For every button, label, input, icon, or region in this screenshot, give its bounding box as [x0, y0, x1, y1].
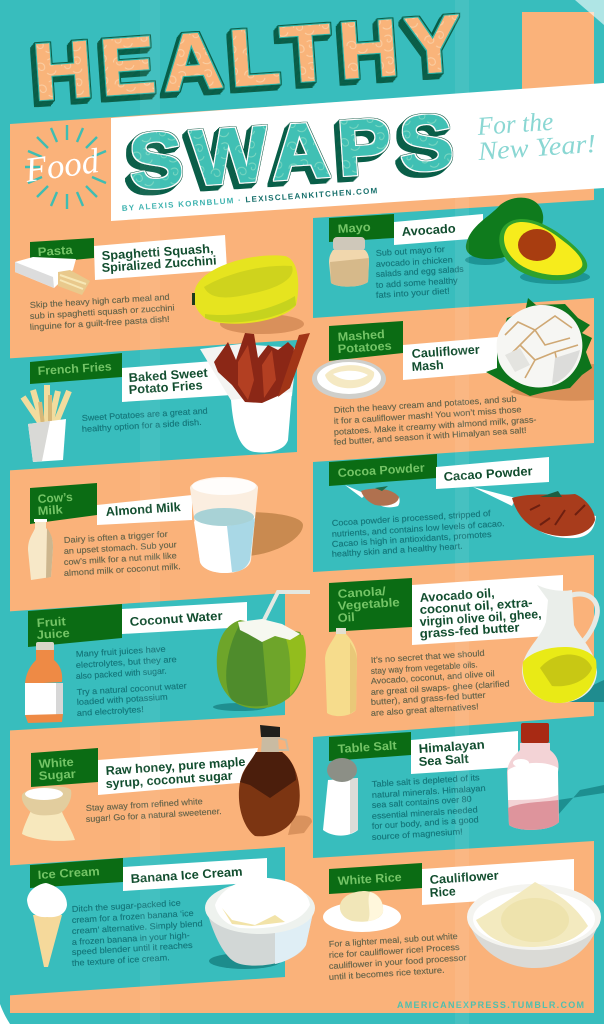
- title box: cacao powder: Cacao Powder: [443, 464, 533, 484]
- icon: maple syrup bottle: [239, 725, 312, 836]
- body text: cow's milk: Dairy is often a trigger for: [64, 529, 168, 545]
- body text: french fries: Sweet Potatoes are a great and: [82, 406, 208, 423]
- title box: himalayan sea salt: Himalayan: [418, 738, 485, 756]
- body text: ice cream: speed blender until it reaches: [72, 940, 193, 957]
- title box: cauliflower mash: Mash: [411, 358, 444, 374]
- body text: white rice: [328, 931, 467, 982]
- icon: olive oil jug: [522, 585, 604, 703]
- title box: raw honey: [98, 748, 258, 795]
- label: white sugar: Sugar: [38, 767, 76, 783]
- subtitle: For the New Year: [474, 104, 597, 166]
- tag: pasta: [30, 238, 94, 264]
- body text: pasta: [30, 292, 175, 332]
- body text: canola oil: It’s no secret that we should: [370, 648, 485, 665]
- label: mashed potatoes: Mashed: [337, 327, 385, 344]
- icon: mayo jar: [329, 237, 369, 287]
- body text: pasta: sub in spaghetti squash or zucchini: [30, 302, 175, 321]
- body text: mayo: to add some healthy: [376, 275, 459, 290]
- panel: top right orange block: [522, 12, 594, 102]
- panel: mashed potatoes orange: [313, 298, 594, 462]
- body text: white rice: cauliflower in your food processor: [328, 952, 467, 971]
- icon: cacao spoon: [473, 487, 596, 538]
- icon: french fries: [23, 385, 69, 462]
- label: mashed potatoes: [337, 327, 392, 356]
- title box: avocado: Avocado: [401, 221, 456, 239]
- card: fruit juice: [25, 592, 310, 723]
- title word: Healthy: HEALTHY: [30, 0, 471, 117]
- card: white rice: [323, 859, 601, 982]
- label: cow's milk: [37, 490, 73, 518]
- tag: canola oil: [329, 578, 412, 632]
- title box: banana ice cream: [123, 858, 267, 891]
- tag: table salt: [329, 732, 411, 761]
- body text: mashed potatoes: potatoes. Make it creamy with almond milk, grass-: [333, 414, 537, 437]
- tag: cow's milk: [30, 483, 97, 524]
- card: cocoa powder: [329, 454, 596, 559]
- title box: spaghetti squash: Spaghetti Squash,: [101, 242, 214, 263]
- tag: white rice: [329, 863, 422, 894]
- body text: cow's milk: an upset stomach. Sub your: [64, 539, 177, 556]
- icon: glass of almond milk: [190, 477, 303, 573]
- body text: canola oil: stay way from vegetable oils.: [370, 659, 478, 676]
- body text: white rice: For a lighter meal, sub out white: [328, 931, 458, 949]
- body text: french fries: [82, 406, 208, 434]
- label: pasta: Pasta: [37, 243, 73, 259]
- icon: food sunburst: [25, 125, 106, 209]
- title box: spaghetti squash: [94, 235, 227, 280]
- card: cow's milk: [28, 477, 303, 580]
- panel: fruit juice teal: [0, 593, 285, 731]
- label: canola vegetable oil: [337, 584, 400, 625]
- body text: table salt: Table salt is depleted of its: [371, 772, 480, 789]
- card: mayo: [329, 198, 590, 300]
- icon: cauliflower rice bowl: [467, 882, 601, 968]
- title box: cauliflower rice: [422, 859, 574, 905]
- icon: sugar sack: [22, 786, 75, 841]
- title box: avocado: [394, 214, 483, 245]
- title box: baked sweet potato fries: Potato Fries: [128, 378, 203, 397]
- body text: cow's milk: [64, 529, 181, 578]
- tag: cocoa powder: [329, 454, 437, 486]
- icon: banana ice cream bowl: [205, 878, 315, 969]
- body text: canola oil: [370, 648, 510, 718]
- body text: white sugar: Stay away from refined white: [86, 796, 203, 813]
- title box: raw honey: Raw honey, pure maple: [105, 755, 246, 778]
- label: mayo: Mayo: [337, 220, 371, 236]
- title box: cauliflower rice: Cauliflower: [429, 868, 499, 887]
- panel: ice cream teal: [0, 847, 285, 996]
- title box: avocado oil: grass-fed butter: [419, 620, 520, 641]
- tag: ice cream: [30, 858, 123, 888]
- body text: cocoa powder: healthy skin and a healthy heart.: [331, 541, 463, 559]
- body text: table salt: [371, 772, 486, 842]
- title box: raw honey: syrup, coconut sugar: [105, 769, 233, 791]
- tag: mayo: [329, 214, 394, 242]
- body text: table salt: essential minerals needed: [371, 804, 478, 821]
- body text: mashed potatoes: Ditch the heavy cream and potatoes, and sub: [333, 394, 517, 415]
- label: fruit juice: Fruit: [36, 614, 66, 630]
- body text: mashed potatoes: it for a cauliflower mash! You won’t miss those: [333, 404, 522, 426]
- title word: Swaps: SWAPS: [126, 97, 464, 206]
- title box: cacao powder: [436, 457, 549, 489]
- label: canola vegetable oil: Vegetable: [337, 595, 400, 613]
- body text: white sugar: [86, 796, 222, 824]
- label: white sugar: [38, 755, 76, 783]
- tag: french fries: [30, 353, 122, 384]
- title box: almond milk: Almond Milk: [105, 500, 181, 519]
- body text: table salt: for our body, and is a good: [371, 814, 479, 831]
- title box: cauliflower mash: [403, 337, 498, 380]
- label: table salt: Table Salt: [337, 738, 397, 756]
- script label: Food: Food: [22, 141, 102, 190]
- card: ice cream: [27, 858, 315, 969]
- subtitle: For the New Year: New Year!: [476, 129, 597, 166]
- body text: ice cream: cream for a frozen banana ‘ice: [72, 908, 194, 925]
- label: canola vegetable oil: Oil: [337, 610, 355, 625]
- card: pasta: [15, 235, 304, 334]
- body text: french fries: healthy option for a side dish.: [82, 417, 202, 434]
- body text: mashed potatoes: [333, 394, 537, 447]
- icon: ice cream cone: [27, 883, 67, 967]
- tag: white sugar: [31, 748, 98, 787]
- body text: white sugar: sugar! Go for a natural sweetener.: [86, 806, 222, 824]
- white title banner: [111, 83, 604, 221]
- body text: fruit juice: electrolytes, but they are: [76, 654, 177, 670]
- icon: cocoa spoon: [345, 485, 400, 507]
- body text: cocoa powder: [331, 508, 505, 559]
- title box: coconut water: [122, 602, 247, 634]
- label: white rice: White Rice: [337, 870, 402, 888]
- body text: ice cream: Ditch the sugar-packed ice: [72, 898, 181, 914]
- title box: banana ice cream: Banana Ice Cream: [130, 865, 243, 886]
- title box: baked sweet potato fries: Baked Sweet: [128, 366, 209, 385]
- body text: mayo: avocado in chicken: [376, 254, 453, 269]
- title box: avocado oil: coconut oil, extra-: [419, 596, 533, 617]
- icon: spaghetti squash: [192, 255, 304, 334]
- title box: himalayan sea salt: Sea Salt: [418, 752, 470, 769]
- title box: cauliflower rice: Rice: [429, 884, 456, 900]
- icon: pasta box: [15, 257, 90, 295]
- label: cow's milk: Cow’s: [37, 490, 73, 506]
- body text: mayo: Sub out mayo for: [376, 244, 445, 258]
- body text: cocoa powder: Cacao is high in antioxidants, promotes: [331, 529, 492, 549]
- label: cocoa powder: Cocoa Powder: [337, 461, 425, 480]
- title box: avocado oil: [412, 575, 563, 645]
- author credit: BY ALEXIS KORNBLUM · LEXISCLEANKITCHEN.COM: [122, 186, 378, 213]
- panel: white rice orange: [313, 841, 594, 1013]
- body text: fruit juice: and electrolytes!: [77, 704, 144, 718]
- body text: fruit juice: also packed with sugar.: [76, 666, 167, 681]
- footer credit: AMERICANEXPRESS.TUMBLR.COM: [397, 1000, 584, 1010]
- body text: table salt: sea salt contains over 80: [371, 794, 472, 810]
- label: fruit juice: Juice: [36, 626, 70, 642]
- title box: himalayan sea salt: [411, 731, 518, 774]
- body text: ice cream: the texture of ice cream.: [72, 952, 170, 968]
- body text: ice cream: cream’ alternative. Simply blend: [72, 918, 203, 936]
- body text: mashed potatoes: fed butter, and season it with Himalyan sea salt!: [333, 425, 527, 447]
- card: french fries: [23, 333, 310, 462]
- title box: spaghetti squash: Spiralized Zucchini: [101, 253, 217, 275]
- title box: baked sweet potato fries: [122, 360, 232, 402]
- body text: fruit juice: [76, 644, 187, 718]
- label: ice cream: Ice Cream: [37, 864, 100, 882]
- body text: mayo: [376, 244, 464, 300]
- body text: white rice: rice for cauliflower rice! Process: [328, 942, 460, 960]
- body text: cocoa powder: nutrients, and contains low levels of cacao.: [331, 518, 505, 539]
- icon: juice bottle: [25, 642, 63, 723]
- title box: almond milk: [97, 495, 192, 525]
- tag: mashed potatoes: [329, 321, 403, 361]
- body text: mayo: salads and egg salads: [376, 264, 464, 279]
- card: table salt: [323, 723, 604, 842]
- panel: canola oil orange: [313, 555, 594, 737]
- title box: avocado oil: Avocado oil,: [419, 586, 495, 605]
- icon: milk bottle: [28, 519, 53, 580]
- body text: pasta: linguine for a guilt-free pasta dish!: [30, 314, 170, 332]
- body text: cow's milk: almond milk or coconut milk.: [64, 561, 181, 578]
- label: mashed potatoes: Potatoes: [337, 339, 392, 356]
- body text: canola oil: are also great alternatives!: [370, 701, 479, 718]
- label: fruit juice: [36, 614, 70, 642]
- label: cow's milk: Milk: [37, 502, 63, 518]
- icon: vegetable oil bottle: [325, 628, 357, 716]
- label: french fries: French Fries: [37, 359, 112, 378]
- body text: cow's milk: cow’s milk for a nut milk like: [64, 550, 177, 567]
- subtitle: For the New Year: For the: [475, 107, 554, 141]
- icon: pink salt bottle: [507, 723, 604, 830]
- tag: fruit juice: [28, 604, 122, 647]
- icon: mashed potato plate: [312, 359, 386, 399]
- body text: fruit juice: loaded with potassium: [77, 692, 168, 707]
- label: canola vegetable oil: Canola/: [337, 584, 387, 601]
- icon: avocado: [465, 198, 590, 284]
- card: white sugar: [22, 725, 312, 841]
- body text: white rice: until it becomes rice texture.: [328, 965, 445, 982]
- body text: ice cream: a frozen banana in your high-: [72, 930, 190, 947]
- icon: cauliflower: [486, 298, 594, 401]
- body text: fruit juice: Many fruit juices have: [76, 644, 166, 659]
- panel: french fries teal: [0, 340, 297, 471]
- title box: coconut water: Coconut Water: [129, 609, 223, 629]
- body text: canola oil: Avocado, coconut, and olive oil: [370, 668, 495, 686]
- card: mashed potatoes: [312, 298, 594, 447]
- body text: mayo: fats into your diet!: [376, 286, 450, 300]
- body text: table salt: natural minerals. Himalayan: [371, 783, 486, 800]
- icon: coconut with straw: [213, 592, 310, 711]
- body text: ice cream: [72, 898, 203, 968]
- icon: salt shaker: [323, 758, 358, 836]
- card: canola oil: [325, 575, 604, 718]
- body text: table salt: source of magnesium!: [371, 826, 463, 842]
- label: white sugar: White: [38, 755, 74, 771]
- title box: cauliflower mash: Cauliflower: [411, 343, 480, 361]
- body text: cocoa powder: Cocoa powder is processed, stripped of: [331, 508, 491, 528]
- title box: avocado oil: virgin olive oil, ghee,: [419, 607, 542, 629]
- body text: canola oil: butter), and grass-fed butter: [370, 690, 486, 707]
- body text: fruit juice: Try a natural coconut water: [77, 680, 187, 697]
- icon: white rice plate: [323, 891, 401, 932]
- body text: canola oil: are great oil swaps- ghee (clarified: [370, 678, 510, 697]
- body text: pasta: Skip the heavy high carb meal and: [30, 292, 170, 310]
- icon: sweet potato fries: [200, 333, 310, 452]
